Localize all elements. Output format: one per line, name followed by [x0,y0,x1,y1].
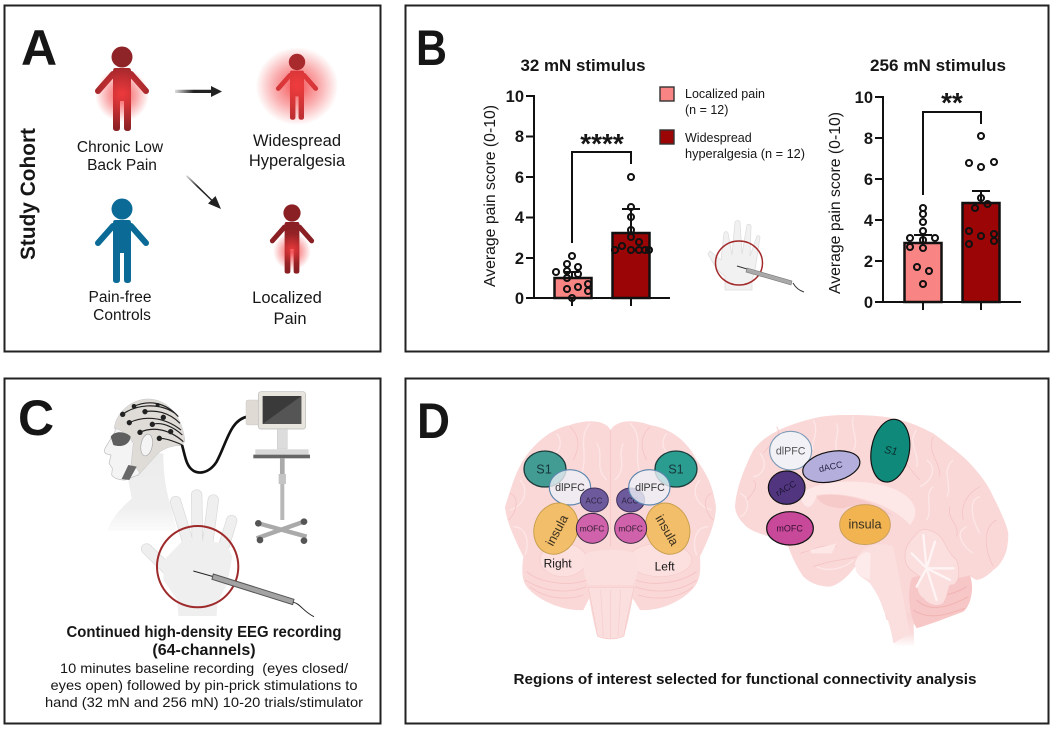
bar chart: 256 mN stimulus: Average pain score (0-10) [827,112,844,294]
icon: chronic low back pain figure [95,46,149,131]
EEG protocol description: eyes open) followed by pin-prick stimulations to [50,677,358,693]
chart title: 256 mN stimulus: 256 mN stimulus [870,57,1006,75]
EEG heading: (64-channels) [152,642,256,659]
region: mOFC left hemisphere: mOFC [618,523,643,533]
region: mOFC: mOFC [776,524,803,534]
region: S1 [866,416,915,485]
illustration: cable [182,417,247,473]
legend: Widespread [685,131,752,145]
illustration: EEG monitor on stand [246,392,310,544]
region: mOFC left hemisphere [615,513,647,543]
icon: localized pain figure [272,204,312,274]
region: S1: S1 [883,444,898,458]
label: localized pain: Localized [252,289,322,307]
bar chart: 32 mN stimulus: Average pain score (0-10) [482,105,499,287]
legend: (n = 12) [685,103,728,117]
EEG protocol description: hand (32 mN and 256 mN) 10-20 trials/stimulator [45,694,363,710]
panel letter D: D [417,393,450,449]
bar chart: 32 mN stimulus: 6 [515,169,524,187]
bar chart: 256 mN stimulus: 0 [864,294,873,312]
sagittal brain regions of interest [767,416,915,545]
region: mOFC right hemisphere [576,513,608,543]
icon: widespread hyperalgesia figure [256,47,338,125]
EEG protocol description: 10 minutes baseline recording (eyes closed/ [60,660,348,676]
region: dlPFC right hemisphere [549,470,591,505]
region: dlPFC left hemisphere [629,470,670,505]
bar chart: 32 mN stimulus: 2 [515,250,524,268]
label: localized pain: Pain [273,310,307,328]
region: insula left hemisphere [638,497,697,560]
panel D: regions of interest [406,378,1048,724]
region: insula left hemisphere: insula [652,512,682,549]
region: S1 right hemisphere: S1 [536,463,552,477]
label: chronic low back pain: Back Pain [87,157,157,174]
region: mOFC [767,512,813,545]
label: pain-free controls: Controls [93,307,151,324]
region: rACC [768,471,805,504]
bar chart: 256 mN stimulus [827,87,1021,312]
label: chronic low back pain: Chronic Low [77,139,164,156]
bar chart: 32 mN stimulus: 8 [515,128,524,146]
illustration: EEG cap on head [104,399,185,480]
label: Left: Left [655,559,675,573]
bar chart: 32 mN stimulus: 0 [515,290,524,308]
region: dlPFC left hemisphere: dlPFC [635,482,665,494]
region: rACC: rACC [774,478,798,498]
bar chart: 256 mN stimulus: 4 [864,212,874,230]
bar chart: 256 mN stimulus: ** [941,87,963,118]
panel letter B: B [416,20,447,76]
chart title: 32 mN stimulus: 32 mN stimulus [520,57,646,75]
arrow to localized pain [186,175,221,209]
panel A: study cohort [4,6,380,352]
illustration: neck and shoulders [107,453,177,531]
region: insula: insula [848,518,882,532]
region: dACC: dACC [818,459,844,474]
vertical heading: Study Cohort: Study Cohort [16,128,40,260]
bar chart: 32 mN stimulus: **** [580,128,624,159]
bar chart: 32 mN stimulus: 4 [515,209,525,227]
region: insula [840,505,890,545]
region: dlPFC right hemisphere: dlPFC [555,482,585,494]
legend: Localized pain [685,87,765,101]
panel B: pain score charts [406,6,1048,352]
region: S1 right hemisphere [524,451,566,487]
region: insula right hemisphere [527,497,585,560]
region: ACC left hemisphere [617,488,645,512]
region: insula right hemisphere: insula [543,512,572,548]
illustration: hand with stimulator [147,495,314,617]
panel letter C: C [18,390,54,446]
bar chart: 256 mN stimulus: 6 [864,171,873,189]
illustration: sagittal brain view [735,415,1008,647]
legend: hyperalgesia (n = 12) [685,147,805,161]
bar chart: 256 mN stimulus: 8 [864,130,873,148]
icon: hand with pin-prick stimulator [708,220,804,292]
label: pain-free controls: Pain-free [89,289,151,306]
bar chart: 32 mN stimulus: 10 [506,88,524,106]
label: Right: Right [544,556,572,570]
label: widespread hyperalgesia: Hyperalgesia [249,152,346,170]
region: S1 left hemisphere: S1 [668,463,684,477]
bar chart: 256 mN stimulus: 2 [864,253,873,271]
panel C: EEG recording [4,378,380,724]
legend [660,87,805,161]
icon: pain-free control figure [98,198,146,283]
region: ACC left hemisphere: ACC [622,497,639,506]
EEG heading: Continued high-density EEG recording [66,624,342,641]
region: dlPFC: dlPFC [776,446,806,458]
region: ACC right hemisphere: ACC [586,497,603,506]
region: S1 left hemisphere [655,451,697,487]
bar chart: 256 mN stimulus: 10 [855,89,873,107]
bar chart: 32 mN stimulus [482,88,670,308]
frontal brain regions of interest [524,451,697,573]
panel letter A: A [21,20,57,76]
illustration: frontal brain view [505,421,716,639]
region: ACC right hemisphere [580,488,608,512]
label: widespread hyperalgesia: Widespread [253,132,341,150]
arrow to widespread hyperalgesia [175,86,222,97]
region: dACC [800,446,863,487]
region: mOFC right hemisphere: mOFC [580,523,604,533]
caption: regions of interest: Regions of interest selected for functional connectivity analysis [514,672,976,688]
region: dlPFC [770,431,812,470]
